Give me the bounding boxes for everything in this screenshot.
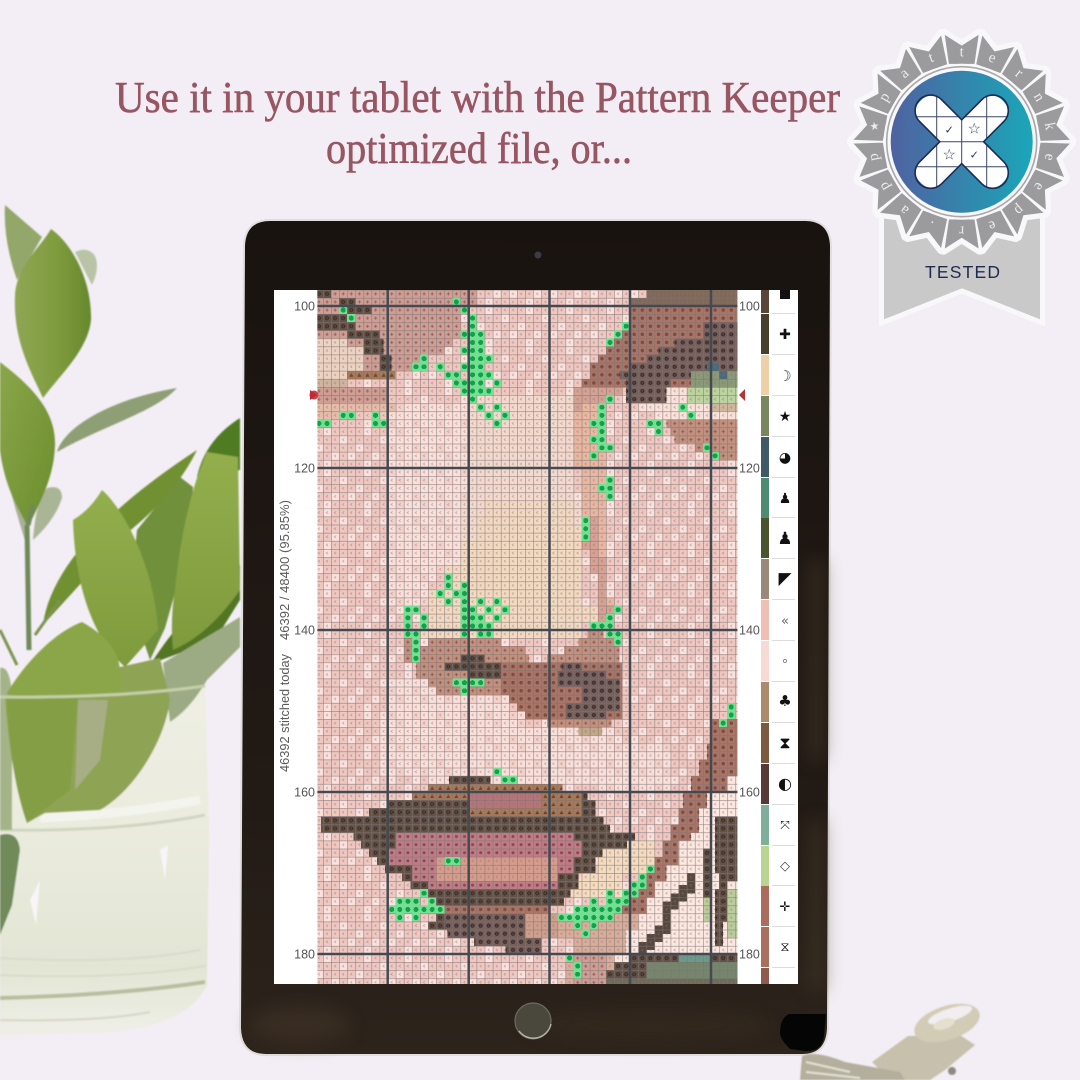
medallion <box>884 64 1040 220</box>
chart: stitched green cells <box>319 302 731 974</box>
left row numbers: 160 <box>294 786 315 800</box>
left row marker <box>310 390 318 400</box>
rosette letters: a <box>897 65 912 82</box>
palette symbols: ★ <box>779 409 791 425</box>
leaves: upper stem <box>0 205 177 650</box>
rosette white outline <box>852 33 1072 250</box>
chart: pale skin areas <box>380 403 671 792</box>
leaves: central cluster <box>0 418 240 667</box>
rosette letters: e <box>1041 152 1058 162</box>
bandage X icon: ☆ <box>967 120 981 138</box>
badge: pattern keeper tested <box>852 33 1072 323</box>
screen panel <box>274 290 798 986</box>
palette symbols: ◤ <box>778 569 792 589</box>
rosette letters: p <box>876 179 893 193</box>
rosette <box>852 33 1072 250</box>
plant in glass vase <box>0 205 240 1036</box>
palette symbols: « <box>781 614 789 629</box>
stitch count label: 46392 / 48400 (95.85%) <box>278 500 292 640</box>
rosette letters: . <box>927 217 936 233</box>
glass vase <box>0 686 209 1036</box>
camera <box>534 252 542 258</box>
rosette letters: p <box>1011 201 1027 218</box>
cross stitch chart <box>314 290 743 986</box>
palette symbols: ♟ <box>779 491 791 507</box>
right row numbers: 160 <box>739 786 760 800</box>
palette symbols: ✛ <box>780 900 791 915</box>
chart: cream nose <box>460 395 582 549</box>
chart: major grid lines <box>314 290 740 984</box>
chart: top right eye <box>630 290 743 306</box>
black sticker corner <box>780 1014 826 1051</box>
rosette letters: p <box>866 152 883 162</box>
right row numbers: 100 <box>739 300 760 314</box>
home button <box>515 1003 551 1039</box>
rosette letters: e <box>1030 179 1047 193</box>
palette symbols: ◐ <box>778 774 792 793</box>
bandage X icon: ☆ <box>942 146 956 164</box>
chart: top left eyebrow <box>315 290 477 379</box>
rosette letters: p <box>876 90 893 104</box>
chart: hair strands <box>606 816 743 986</box>
tablet <box>240 220 831 1055</box>
right row numbers: 120 <box>739 462 760 476</box>
palette symbols: ⤧ <box>780 818 790 832</box>
rosette letters <box>852 33 1072 250</box>
left row numbers: 100 <box>294 300 315 314</box>
ribbon <box>882 190 1042 323</box>
chart: diagonal jaw band <box>614 776 738 962</box>
ribbon: TESTED <box>925 262 1000 282</box>
right row marker <box>739 389 745 401</box>
bandage X icon <box>914 94 1010 190</box>
palette symbols: ◇ <box>780 859 790 874</box>
right row numbers: 180 <box>739 948 760 962</box>
palette symbols: ∘ <box>781 654 789 669</box>
rosette letters: n <box>1030 90 1048 105</box>
rosette letters: r <box>1012 66 1026 81</box>
palette symbols: ⧗ <box>779 733 791 752</box>
title <box>115 73 840 173</box>
chart: lips <box>321 776 635 954</box>
left row numbers: 120 <box>294 462 315 476</box>
right row numbers: 140 <box>739 624 760 638</box>
rosette letters: e <box>986 49 998 67</box>
bandage X icon: ✓ <box>970 149 979 162</box>
progress label: 46392 stitched today <box>278 653 292 772</box>
title: Use it in your tablet with the Pattern Keeper <box>115 73 840 122</box>
left row numbers: 180 <box>294 948 315 962</box>
chart: stitch grid <box>315 290 743 986</box>
metal clip <box>800 996 985 1080</box>
rosette letters: t <box>960 45 965 61</box>
bandage X icon: ✓ <box>945 124 954 137</box>
palette symbols: ✚ <box>779 327 791 343</box>
rosette letters: ★ <box>867 120 882 132</box>
rosette letters: r <box>959 223 964 239</box>
palette symbols: ⧖ <box>780 940 790 955</box>
left row numbers <box>294 300 315 962</box>
rosette letters: e <box>986 217 998 234</box>
title: optimized file, or... <box>326 124 632 173</box>
rosette letters: k <box>1041 121 1058 132</box>
rosette letters: a <box>897 201 912 218</box>
palette symbols: ◕ <box>779 450 791 466</box>
thread colour palette <box>761 290 795 984</box>
palette symbols: ♟ <box>777 529 793 549</box>
bezel shading <box>250 560 824 1043</box>
palette symbols <box>777 290 793 955</box>
chart: nose line <box>574 403 614 606</box>
tablet body <box>240 220 831 1055</box>
rosette letters: t <box>927 50 937 66</box>
chart: nose shadow <box>404 630 620 727</box>
palette symbols: ☽ <box>778 367 792 385</box>
palette symbols: ♣ <box>778 692 792 710</box>
leaves: lower cluster in vase <box>0 617 240 935</box>
right row numbers <box>739 300 760 962</box>
left row numbers: 140 <box>294 624 315 638</box>
chart: skin base <box>315 290 743 986</box>
